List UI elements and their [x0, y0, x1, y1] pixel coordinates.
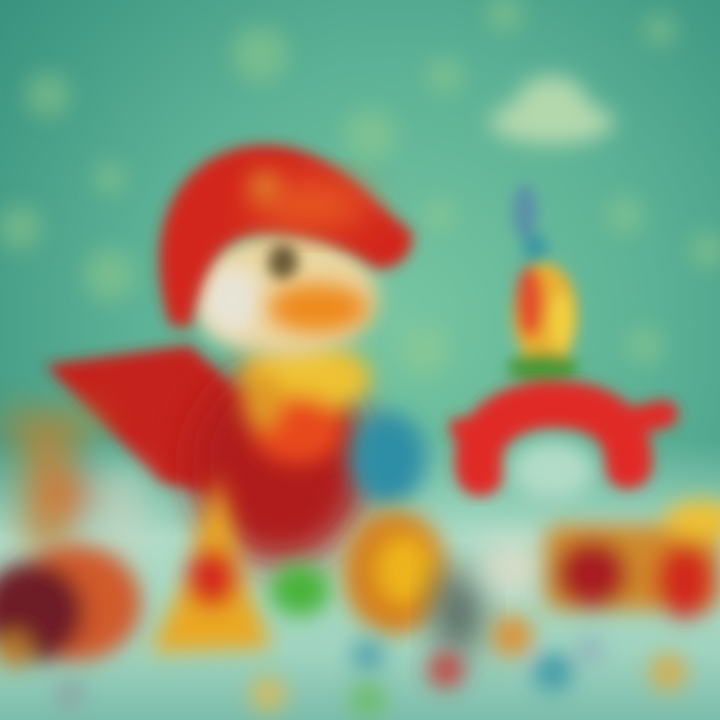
cloud [490, 76, 614, 144]
right toy train [545, 500, 720, 618]
red arch [460, 405, 664, 472]
tower top [513, 184, 548, 263]
small floor toys [56, 615, 687, 718]
red cap [159, 145, 412, 328]
tower body [507, 263, 579, 383]
red toy car [0, 545, 141, 668]
eye [268, 244, 298, 280]
left toy tower [0, 412, 140, 560]
grey toy [434, 568, 482, 656]
beak [268, 284, 368, 332]
duck head [193, 233, 377, 357]
white ball [482, 542, 542, 594]
duck chest [239, 342, 371, 464]
stacking tower [507, 184, 579, 383]
duck toy [45, 145, 412, 565]
red cape [45, 345, 270, 500]
cap emblem [249, 171, 279, 201]
blue wing [350, 412, 426, 504]
yellow cone toy [150, 475, 272, 652]
duck body [192, 365, 368, 565]
background dots [0, 0, 720, 374]
arch opening [511, 440, 595, 500]
cap highlight [250, 181, 370, 229]
white cheek [202, 264, 262, 336]
green ball [270, 564, 330, 616]
orange ball [343, 510, 447, 634]
